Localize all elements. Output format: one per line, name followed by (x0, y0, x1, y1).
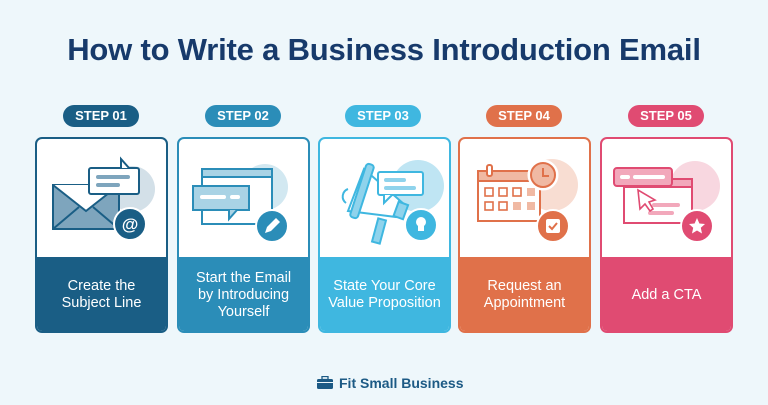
pill: step 02: STEP 02 (217, 108, 269, 123)
label: step 04 (460, 257, 589, 333)
icon: web page with cursor and star (613, 161, 720, 241)
icon: briefcase (317, 376, 333, 389)
label: step 05: Add a CTA (632, 286, 701, 302)
panel: step 03 (318, 137, 451, 333)
pill: step 02 (205, 105, 281, 127)
panel: step 01 (35, 137, 168, 333)
label: step 02: Yourself (218, 304, 269, 320)
label: step 01: Subject Line (62, 295, 141, 311)
label: step 03 (320, 257, 449, 333)
label: step 04: Appointment (484, 295, 565, 311)
panel: step 05 (600, 137, 733, 333)
pill: step 01 (63, 105, 139, 127)
panel: step 02 (177, 137, 310, 333)
panel: step 04 (458, 137, 591, 333)
pill: step 05: STEP 05 (640, 108, 692, 123)
pill: step 03 (345, 105, 421, 127)
footer logo: Fit Small Business (339, 375, 463, 391)
title: How to Write a Business Introduction Email (67, 32, 701, 67)
label: step 01 (37, 257, 166, 333)
pill: step 05 (628, 105, 704, 127)
icon: browser with chat and pencil (192, 164, 288, 241)
label: step 01: Create the (68, 278, 135, 294)
label: step 02: by Introducing (198, 286, 289, 302)
pill: step 01: STEP 01 (75, 108, 127, 123)
label: step 02: Start the Email (196, 270, 291, 286)
icon: megaphone with lightbulb (342, 160, 444, 245)
pill: step 04 (486, 105, 562, 127)
pill: step 04: STEP 04 (498, 108, 550, 123)
icon: envelope with at sign: @ (122, 215, 138, 234)
label: step 04: Request an (487, 278, 562, 294)
icon: envelope with at sign (52, 156, 155, 239)
icon: calendar with clock (477, 159, 578, 241)
label: step 02 (179, 257, 308, 333)
pill: step 03: STEP 03 (357, 108, 409, 123)
label: step 05 (602, 257, 731, 333)
label: step 03: Value Proposition (328, 295, 441, 311)
label: step 03: State Your Core (333, 278, 436, 294)
